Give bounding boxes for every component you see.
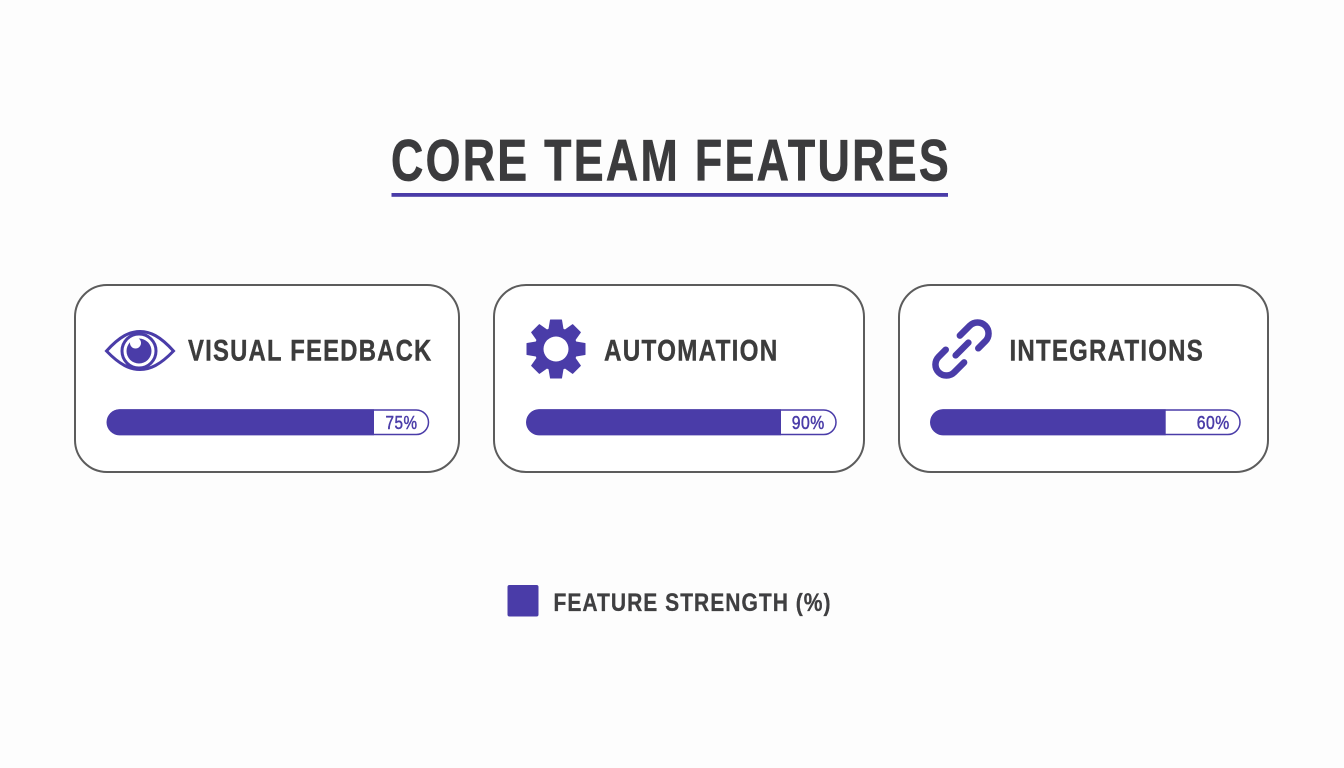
icon: eye (106, 332, 174, 370)
icon: chain link (931, 318, 993, 380)
panel: visual feedback (75, 285, 459, 472)
panel: integrations (899, 285, 1268, 472)
progress bar: 60% (930, 409, 1240, 435)
legend (508, 585, 832, 617)
heading: visual feedback: VISUAL FEEDBACK (188, 334, 432, 368)
progress bar: 90%: 90% (792, 412, 825, 433)
progress bar: 90% (526, 409, 836, 435)
title: CORE TEAM FEATURES (391, 128, 951, 194)
legend: FEATURE STRENGTH (%) (554, 589, 832, 617)
progress bar: 75% (107, 409, 429, 435)
icon: gear (527, 320, 585, 378)
heading: integrations: INTEGRATIONS (1010, 334, 1204, 368)
progress bar: 75%: 75% (386, 412, 418, 433)
progress bar: 60%: 60% (1197, 412, 1230, 433)
panel: automation (494, 285, 864, 472)
heading: automation: AUTOMATION (604, 334, 778, 368)
